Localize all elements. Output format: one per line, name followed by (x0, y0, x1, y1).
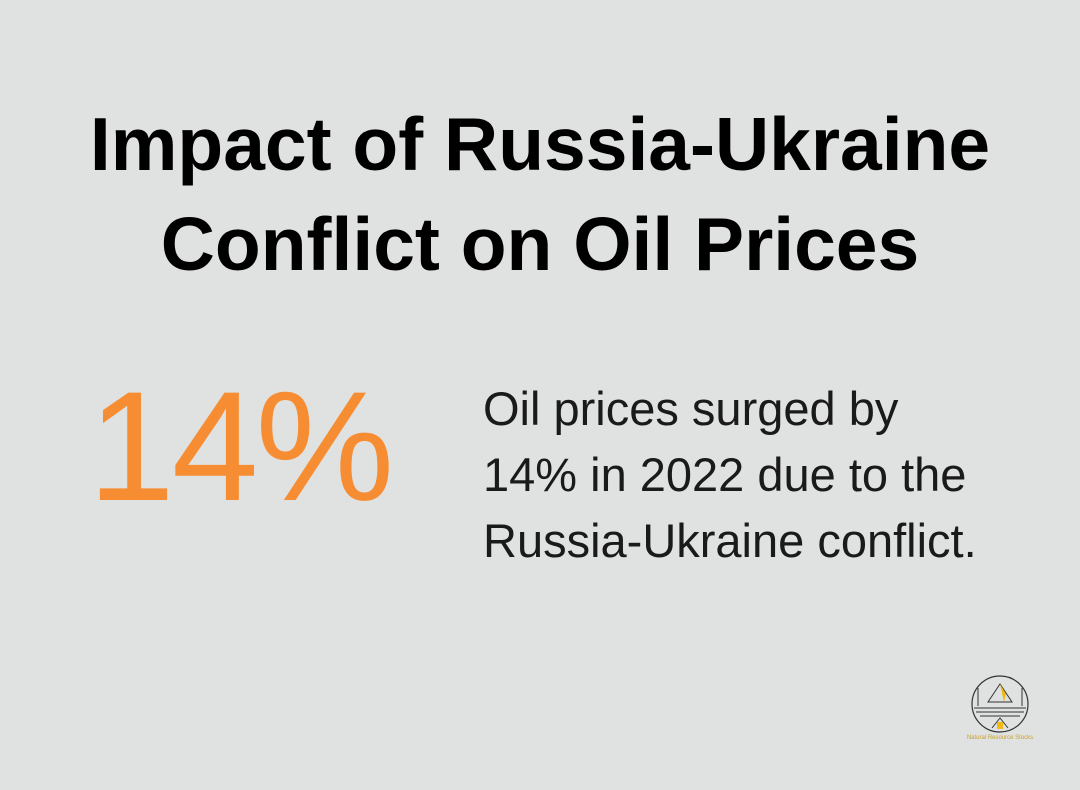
logo: Natural Resource Stocks (967, 735, 1033, 741)
big stat: 14% (88, 360, 391, 534)
description text (483, 382, 977, 567)
title: Conflict on Oil Prices (161, 202, 919, 286)
description text: Oil prices surged by (483, 382, 898, 435)
logo (967, 675, 1033, 741)
description text: Russia-Ukraine conflict. (483, 514, 977, 567)
title (90, 102, 990, 286)
title: Impact of Russia-Ukraine (90, 102, 990, 186)
description text: 14% in 2022 due to the (483, 448, 966, 501)
